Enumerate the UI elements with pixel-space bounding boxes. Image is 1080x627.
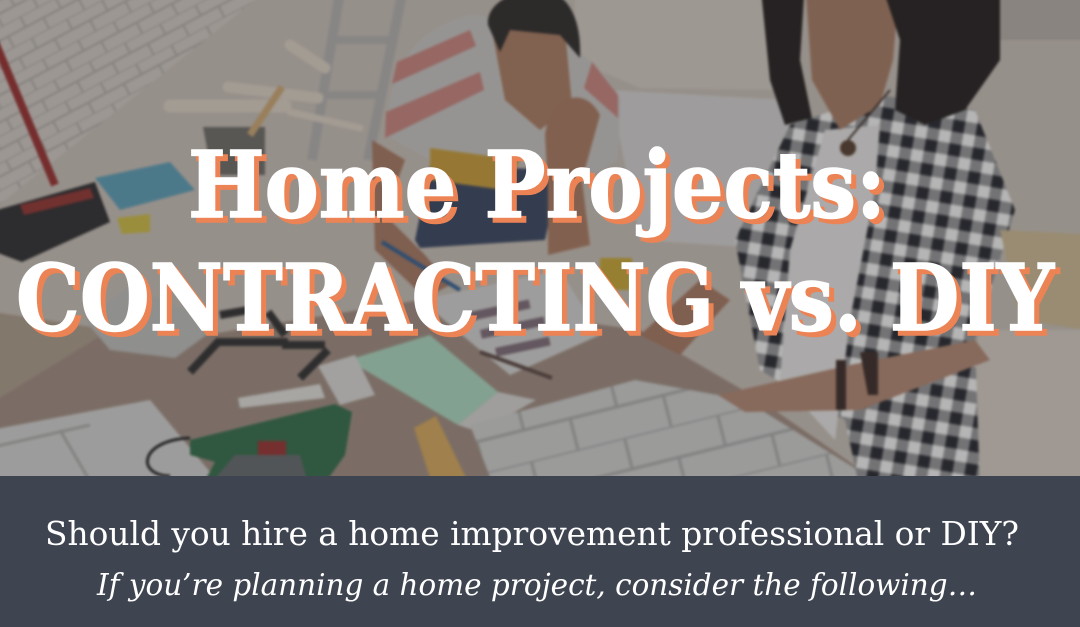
papers on table	[85, 285, 220, 358]
photo dim overlay	[0, 0, 1080, 476]
metal brackets	[190, 308, 328, 378]
brick wallpaper	[470, 380, 890, 490]
blue tray	[95, 162, 195, 210]
drill	[190, 404, 352, 490]
red ladder	[0, 30, 55, 185]
photo background	[0, 0, 1080, 500]
wood planks	[170, 45, 360, 128]
title line 1: Home Projects:	[193, 136, 891, 244]
toolbox	[0, 182, 110, 262]
mint folder	[348, 335, 498, 425]
floor: light planks	[0, 0, 1080, 490]
bag	[318, 355, 375, 405]
subheading text: If you’re planning a home project, consider the following…	[96, 568, 977, 603]
table	[0, 300, 890, 490]
roller	[414, 416, 472, 490]
sofa	[575, 0, 785, 90]
brick wall	[0, 0, 280, 220]
man	[372, 0, 620, 298]
woman	[600, 0, 1015, 490]
title line 1: Home Projects:	[188, 131, 886, 239]
ladder	[312, 0, 405, 160]
footer band	[0, 476, 1080, 627]
question text: Should you hire a home improvement professional or DIY?	[45, 514, 1019, 553]
bucket	[203, 127, 265, 175]
title	[16, 131, 1060, 357]
